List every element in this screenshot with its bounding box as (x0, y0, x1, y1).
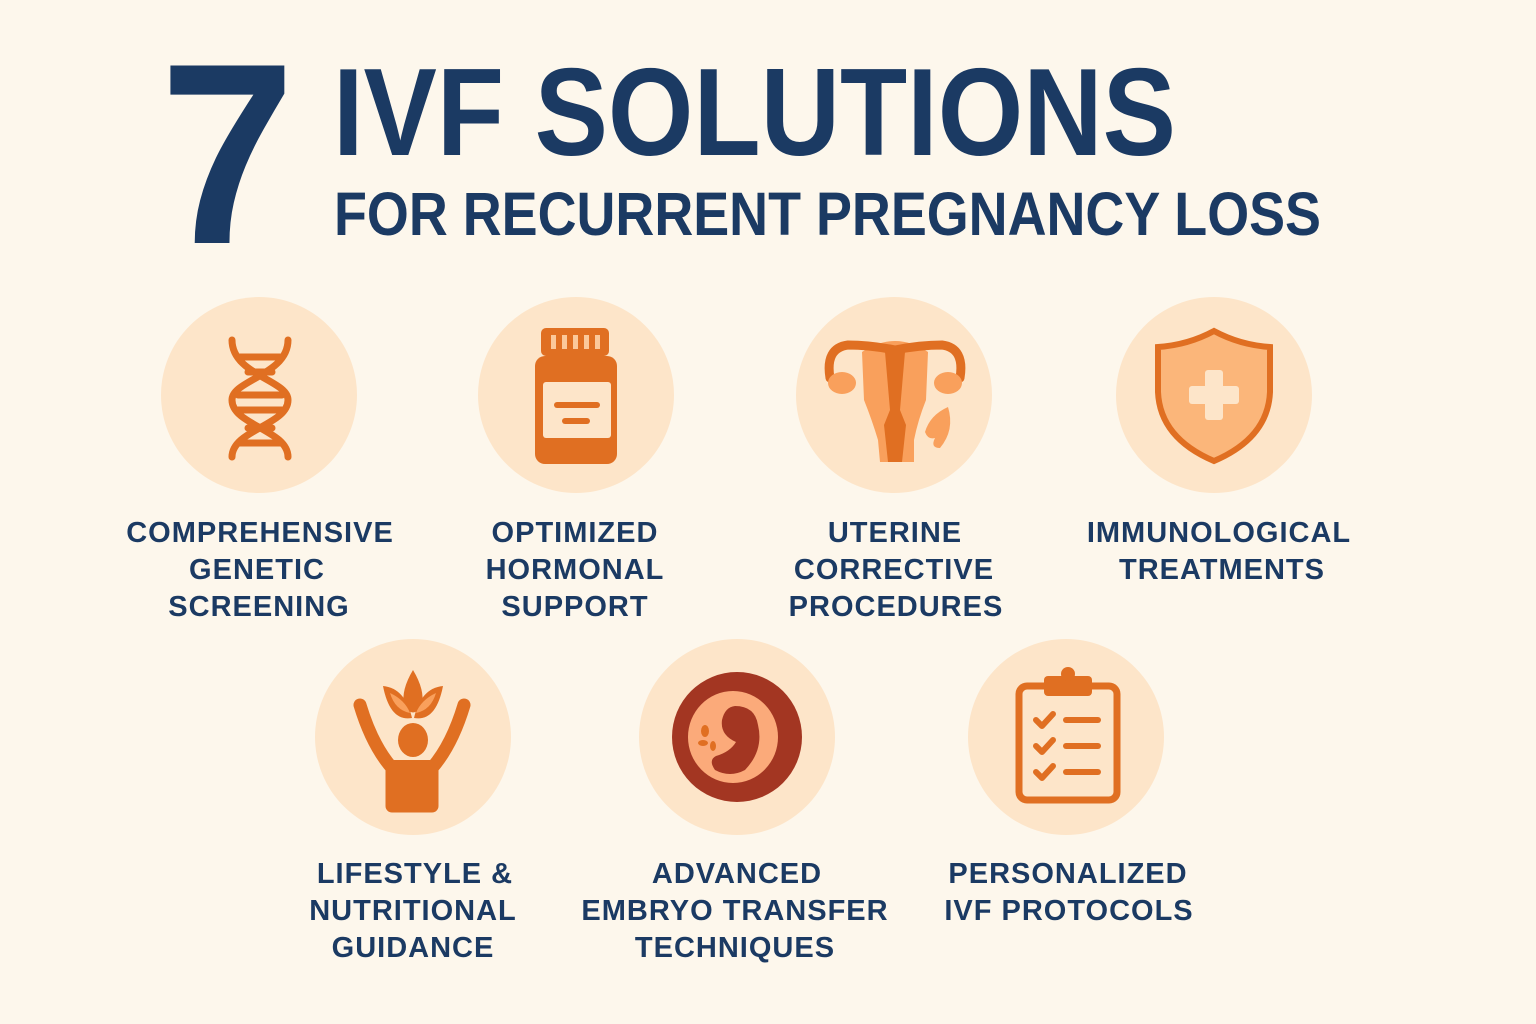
label: IVF PROTOCOLS (944, 895, 1194, 927)
item: immunological (1087, 297, 1351, 586)
icon: uterus (828, 341, 962, 462)
label: OPTIMIZED (492, 517, 658, 549)
item: genetic screening (126, 297, 394, 623)
label: IMMUNOLOGICAL (1087, 517, 1351, 549)
label: ADVANCED (652, 858, 822, 890)
label: UTERINE (828, 517, 962, 549)
icon: pill bottle (535, 328, 617, 464)
item: lifestyle (309, 639, 517, 964)
label: TECHNIQUES (635, 932, 835, 964)
icon: shield (1158, 331, 1270, 461)
label: PERSONALIZED (948, 858, 1188, 890)
label: GUIDANCE (332, 932, 494, 964)
item: personalized protocols (944, 639, 1194, 927)
icon: dna (232, 340, 288, 457)
label: SCREENING (168, 591, 350, 623)
label: SUPPORT (501, 591, 649, 623)
label: HORMONAL (486, 554, 664, 586)
title: number 7: 7 (160, 9, 295, 298)
icon: clipboard (1019, 667, 1117, 800)
icon: embryo (672, 672, 802, 802)
subtitle: FOR RECURRENT PREGNANCY LOSS (334, 180, 1321, 248)
label: LIFESTYLE & (317, 858, 513, 890)
label: NUTRITIONAL (309, 895, 517, 927)
label: GENETIC (189, 554, 325, 586)
item: embryo transfer (581, 639, 889, 964)
label: PROCEDURES (789, 591, 1003, 623)
item: hormonal support (478, 297, 674, 623)
item: uterine procedures (789, 297, 1003, 623)
label: CORRECTIVE (794, 554, 994, 586)
icon: person with lotus (360, 670, 464, 806)
title: IVF SOLUTIONS: IVF SOLUTIONS (333, 44, 1176, 182)
label: COMPREHENSIVE (126, 517, 394, 549)
label: TREATMENTS (1119, 554, 1325, 586)
label: EMBRYO TRANSFER (581, 895, 889, 927)
